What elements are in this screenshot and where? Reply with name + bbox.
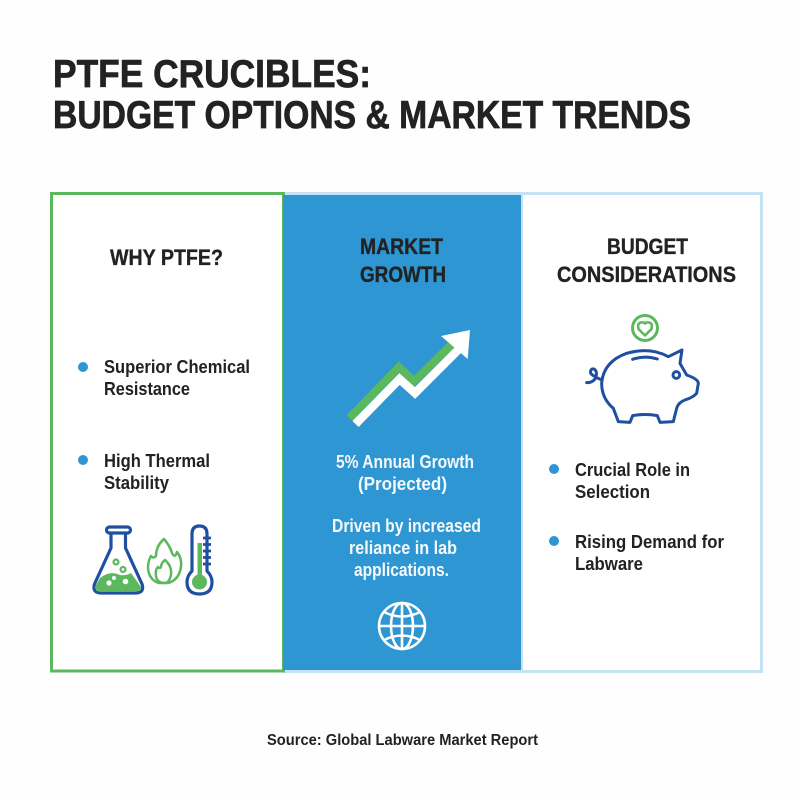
bullet: crucial role: Selection [575,482,650,502]
bullet: rising demand: Labware [575,554,643,574]
heading: budget considerations: CONSIDERATIONS [557,262,736,287]
bullet: thermal stability: High Thermal [104,451,210,471]
title: BUDGET OPTIONS & MARKET TRENDS [53,94,691,137]
panel: budget considerations [522,194,762,672]
bullet: crucial role [549,460,690,502]
panel: why PTFE [52,194,284,671]
icon: growth arrow [350,330,470,424]
heading: why PTFE: WHY PTFE? [110,245,223,270]
text: growth figure [336,452,474,494]
text: growth figure: 5% Annual Growth [336,452,474,472]
icon: globe [379,603,425,649]
heading: market growth [360,234,446,287]
bullet: thermal stability [78,451,210,493]
heading: budget considerations: BUDGET [607,234,688,259]
text: growth driver [332,516,481,580]
bullet: crucial role: Crucial Role in [575,460,690,480]
bullet: chemical resistance: Resistance [104,379,190,399]
bullet: chemical resistance [78,357,250,399]
heading: budget considerations [557,234,736,287]
icon: coin with heart check [632,316,658,340]
bullet: rising demand [549,532,724,574]
text: growth driver: applications. [354,560,449,580]
heading: market growth: GROWTH [360,262,446,287]
icon: flask [94,527,143,593]
source note: Source: Global Labware Market Report [267,732,539,749]
icon: flame [148,539,181,583]
bullet: chemical resistance: Superior Chemical [104,357,250,377]
icon: piggy bank [587,350,698,422]
icon: thermometer [187,526,212,594]
panel: market growth [283,195,521,670]
text: growth driver: reliance in lab [349,538,457,558]
title: PTFE CRUCIBLES: [53,53,371,96]
bullet: thermal stability: Stability [104,473,169,493]
heading: market growth: MARKET [360,234,443,259]
title [53,53,691,137]
text: growth figure: (Projected) [358,474,447,494]
text: growth driver: Driven by increased [332,516,481,536]
bullet: rising demand: Rising Demand for [575,532,724,552]
